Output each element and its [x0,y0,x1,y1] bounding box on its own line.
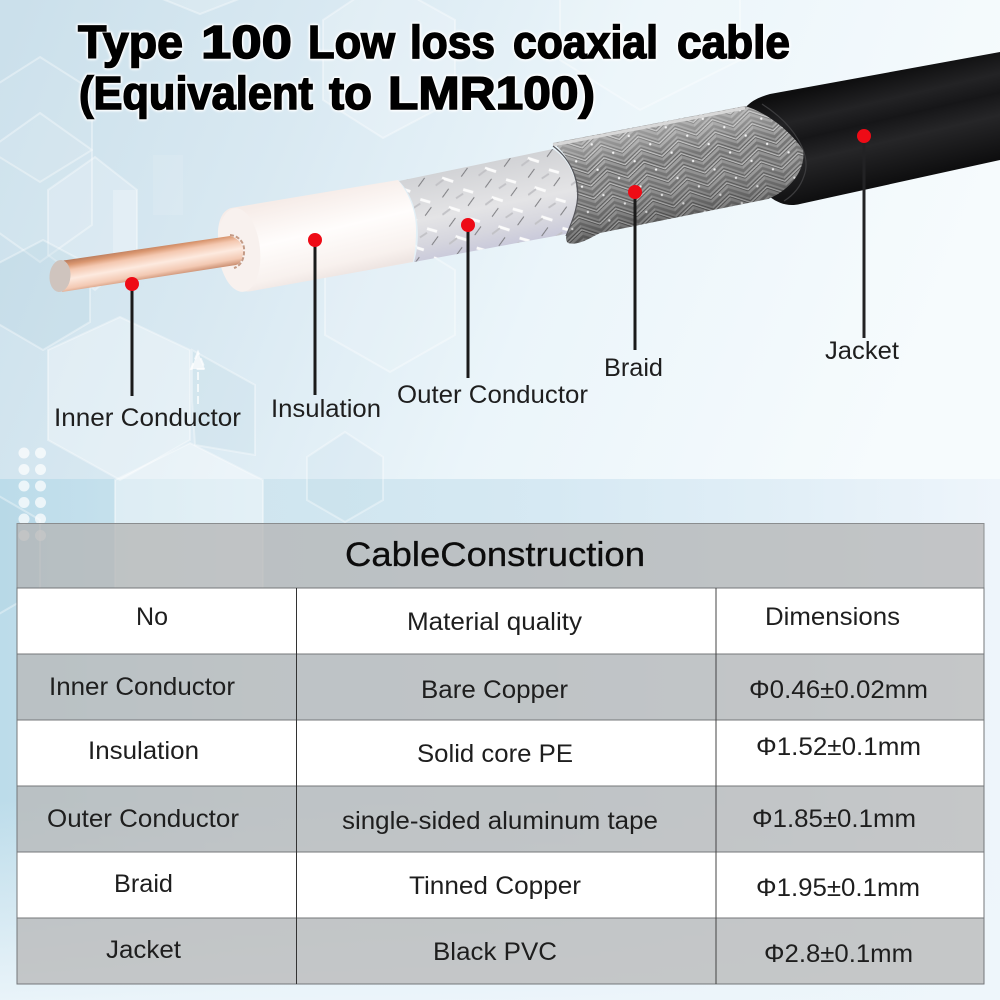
title line 1: 100 [201,16,292,68]
title line 2: (Equivalent [79,67,313,119]
table row: insulation [88,733,921,768]
table row: outer conductor: single-sided aluminum tape [342,807,658,835]
table row: header: Dimensions [765,603,900,631]
table row: insulation: Solid core PE [417,740,573,768]
title line 1: cable [677,16,790,68]
table: cable construction [17,524,984,984]
table row: insulation: Φ1.52±0.1mm [756,733,921,761]
table heading band [17,524,984,588]
callout: braid: Braid [604,354,663,382]
table row: inner conductor: Bare Copper [421,676,568,704]
title line 1: Type [78,16,183,68]
callout: insulation [271,233,381,423]
table row: insulation: Insulation [88,737,199,765]
table row backgrounds [17,588,984,984]
table row: header [136,603,900,636]
table row: jacket: Φ2.8±0.1mm [764,940,913,968]
coaxial cable illustration [48,52,1000,294]
table row: outer conductor: Outer Conductor [47,805,239,833]
title line 1 [78,16,790,68]
table row: header: No [136,603,168,631]
table row: outer conductor [47,805,916,835]
table row: inner conductor: Inner Conductor [49,673,235,701]
callout: braid [604,185,663,382]
title line 1: Low [308,16,395,68]
table row: braid: Braid [114,870,173,898]
table row: jacket: Jacket [106,936,181,964]
cable: inner conductor [48,235,244,293]
cable: jacket [745,52,1000,205]
callout: inner conductor [54,277,241,432]
callout: insulation: Insulation [271,395,381,423]
title line 2: LMR100) [388,67,595,119]
callout: outer conductor [397,218,588,409]
title line 1: loss [410,16,495,68]
table row: jacket [106,936,913,968]
cable: outer conductor [399,146,578,262]
table row: outer conductor: Φ1.85±0.1mm [752,805,916,833]
title [78,16,790,119]
callout: inner conductor: Inner Conductor [54,404,241,432]
table heading band: CableConstruction [345,536,645,574]
table row: braid: Tinned Copper [409,872,581,900]
callout: jacket: Jacket [825,337,899,365]
callout: jacket [825,129,899,365]
title line 2: to [329,67,372,119]
table row: inner conductor [49,673,928,704]
table row: braid: Φ1.95±0.1mm [756,874,920,902]
callout: outer conductor: Outer Conductor [397,381,588,409]
cable: braid [553,106,803,244]
title line 1: coaxial [513,16,658,68]
table row: braid [114,870,920,902]
title line 2 [79,67,595,119]
table row: inner conductor: Φ0.46±0.02mm [749,676,928,704]
cable: insulation [214,180,416,294]
table row: jacket: Black PVC [433,938,557,966]
table row: header: Material quality [407,608,583,636]
